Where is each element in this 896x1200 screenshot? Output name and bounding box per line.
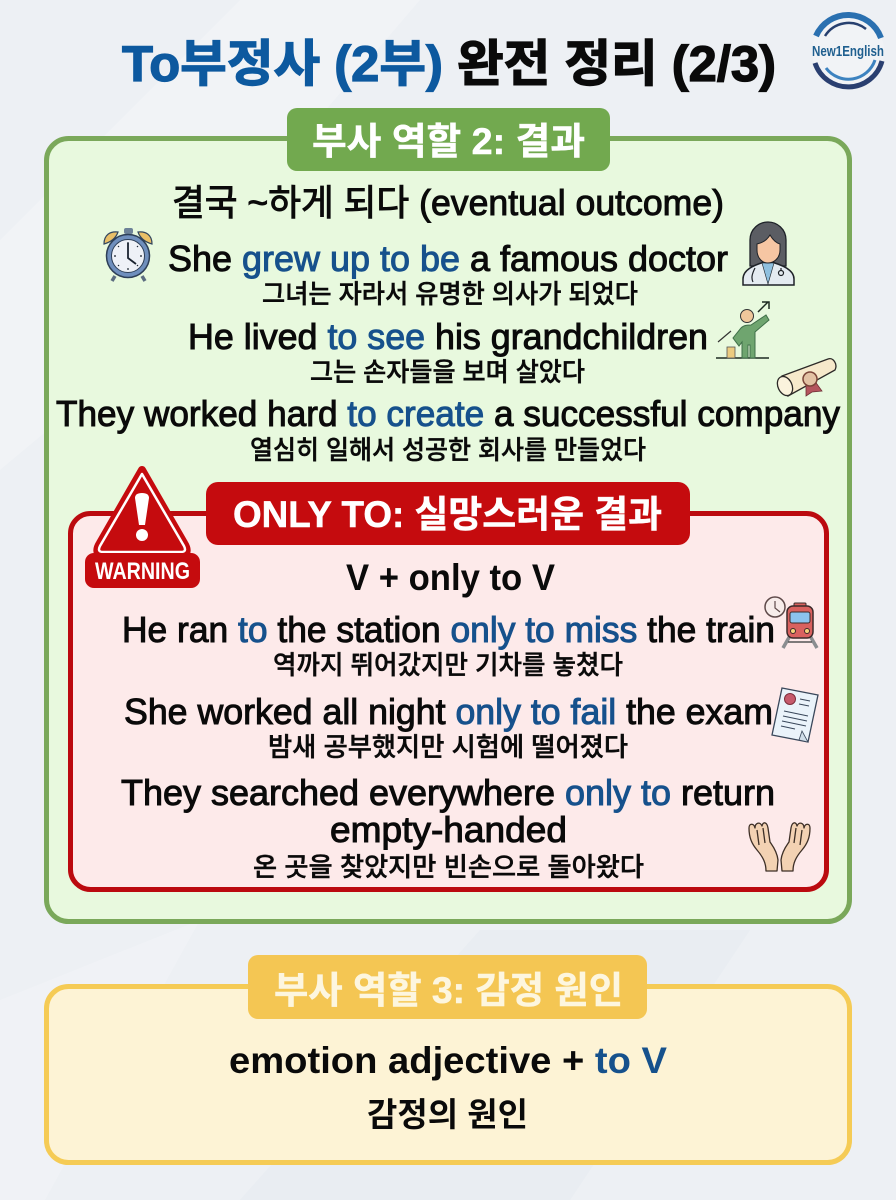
sentence: grew up to be: She grew up to be a famous doctor <box>168 238 728 279</box>
icon: diploma <box>774 359 836 398</box>
logo: New1English <box>812 15 884 87</box>
translation: 그는 손자들을 보며 살았다 <box>310 357 585 387</box>
icon: train and clock <box>765 597 817 648</box>
panel heading: ONLY TO <box>206 482 690 545</box>
translation: 역까지 뛰어갔지만 기차를 놓쳤다 <box>273 650 623 680</box>
caption: 감정의 원인 <box>367 1096 528 1133</box>
icon: alarm clock <box>104 228 152 281</box>
icon: doctor <box>743 222 794 285</box>
icon: person reaching up <box>716 302 769 358</box>
formula: emotion adjective + to V: emotion adjective + to V <box>229 1040 667 1081</box>
sentence: only to miss: He ran to the station only to miss the train <box>122 609 775 650</box>
translation: 그녀는 자라서 유명한 의사가 되었다 <box>262 279 638 309</box>
panel heading: 부사 역할 3 <box>248 955 647 1019</box>
panel: ONLY TO <box>70 470 826 890</box>
sentence: to create: They worked hard to create a successful company <box>56 393 840 434</box>
panel heading: 부사 역할 3: 부사 역할 3: 감정 원인 <box>274 970 623 1011</box>
panel heading: ONLY TO: ONLY TO: 실망스러운 결과 <box>233 494 662 535</box>
icon: exam paper <box>772 688 818 742</box>
icon: empty hands <box>749 823 810 871</box>
panel: 부사 역할 3 감정 원인 <box>46 955 850 1162</box>
sentence: only to return: They searched everywhere only to return <box>121 772 775 813</box>
icon: warning sign: WARNING <box>95 558 190 585</box>
sentence: to see: He lived to see his grandchildren <box>188 316 708 357</box>
panel: 부사 역할 2 결과 <box>46 108 850 922</box>
icon: warning sign <box>85 470 200 588</box>
translation: 온 곳을 찾았지만 빈손으로 돌아왔다 <box>253 852 644 882</box>
panel heading: 부사 역할 2 <box>287 108 610 171</box>
formula: V + only to V: V + only to V <box>346 557 555 598</box>
sentence continuation: empty-handed <box>330 809 567 850</box>
translation: 밤새 공부했지만 시험에 떨어졌다 <box>268 732 628 762</box>
panel heading: 부사 역할 2: 부사 역할 2: 결과 <box>312 121 585 162</box>
translation: 열심히 일해서 성공한 회사를 만들었다 <box>250 435 646 465</box>
title: To부정사 (2부) 완전 정리 (2/3) <box>122 36 776 92</box>
sentence: only to fail: She worked all night only to fail the exam <box>124 691 773 732</box>
subtitle: 결국 ~하게 되다 (eventual outcome) <box>172 182 724 223</box>
